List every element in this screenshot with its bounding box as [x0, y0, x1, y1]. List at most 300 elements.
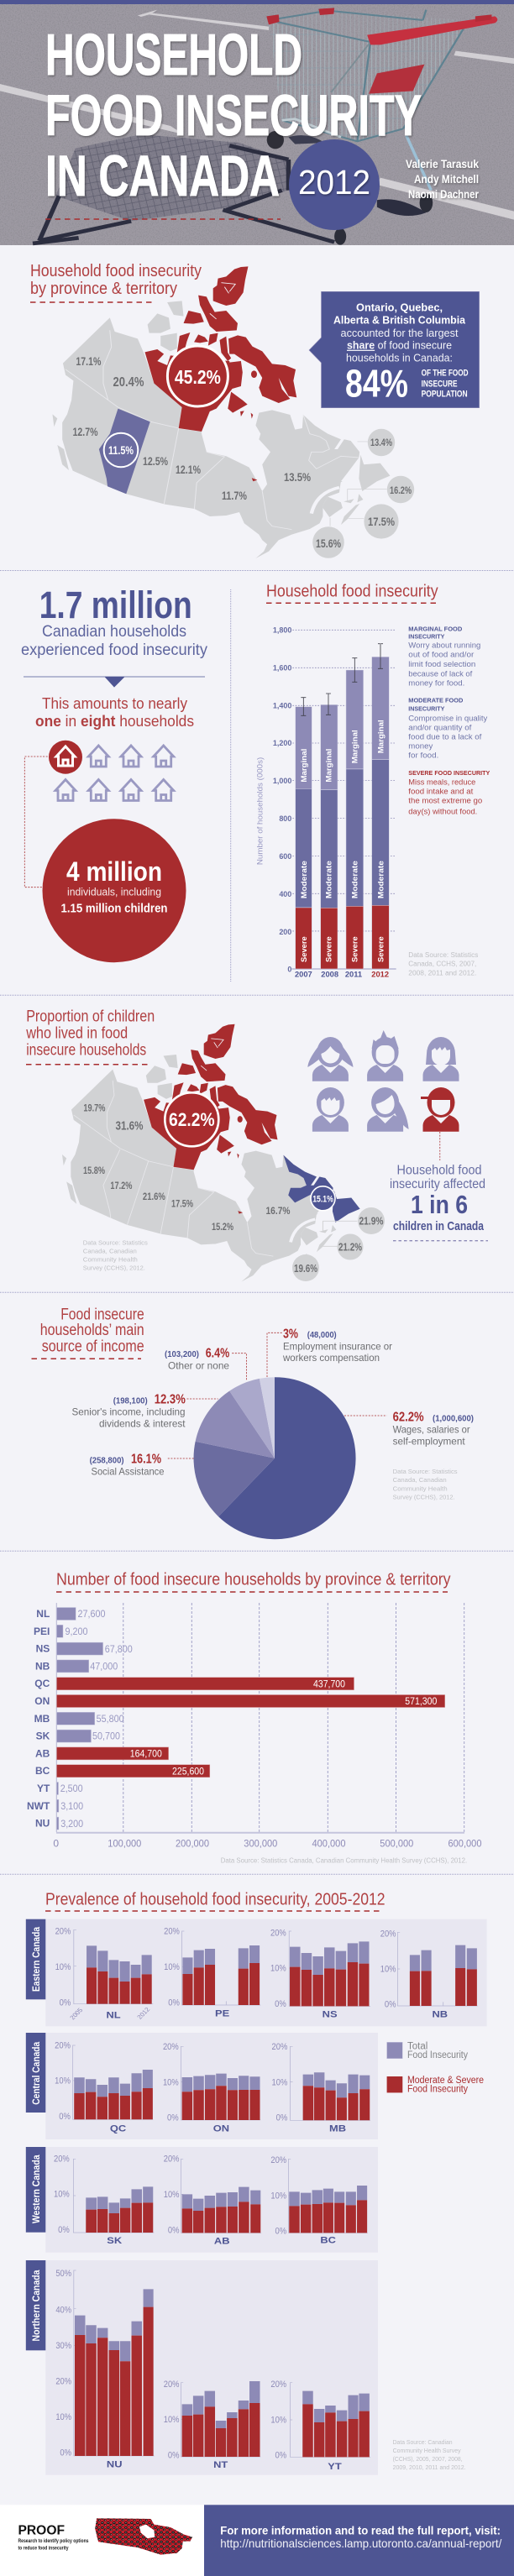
label: 12.3% senior's income: (198,100) — [113, 1395, 148, 1406]
highlight: Newfoundland 15.1% — [311, 1186, 335, 1211]
data source note — [408, 951, 478, 977]
legend: Food Insecurity — [407, 2085, 468, 2095]
chart: NT: 0% — [168, 2449, 180, 2460]
label: 6.4% other or none: 6.4% — [206, 1347, 229, 1361]
authors: Valerie Tarasuk — [406, 157, 479, 170]
red circle: 4 million: 1.15 million children — [60, 902, 168, 916]
label: 3% employment insurance: 3% — [283, 1327, 298, 1341]
chart: BC: 0% — [275, 2226, 286, 2236]
heading: Proportion of children — [26, 1008, 155, 1026]
chart: MB: 10% — [272, 2076, 288, 2087]
horizontal bar chart: NU — [35, 1818, 50, 1830]
horizontal bar chart: 437,700 — [313, 1678, 345, 1689]
footer left: PROOF branding — [0, 2505, 204, 2576]
callout: 84% share: POPULATION — [422, 390, 468, 400]
horizontal bar chart: 9,200 — [66, 1626, 88, 1637]
chart: NB: 10% — [380, 1964, 396, 1974]
label: 3% employment insurance — [282, 1327, 392, 1364]
legend definitions: Compromise in quality — [408, 714, 488, 722]
legend definitions: money for food. — [408, 679, 464, 688]
stacked bar chart: Marginal — [376, 720, 385, 753]
chart: NL: NL — [106, 2009, 121, 2020]
label: 16.1% social assistance: Social Assistance — [91, 1466, 165, 1478]
chart: NL: 2005 — [68, 2007, 84, 2021]
chart: YT: 0% — [275, 2450, 286, 2460]
province labels: 11.7% — [222, 490, 247, 502]
chart: PE: 10% — [164, 1961, 180, 1972]
chart: NB: 20% — [380, 1928, 396, 1939]
leader lines — [168, 1333, 387, 1458]
stacked bar chart — [255, 626, 396, 978]
horizontal bar chart: 225,600 — [172, 1765, 204, 1777]
stacked bar chart: Severe — [300, 936, 308, 962]
data source note: Canada, CCHS, 2007, — [408, 961, 476, 968]
horizontal bar chart: YT — [37, 1783, 50, 1794]
province labels: 17.1% — [76, 355, 101, 368]
connectors — [307, 1221, 357, 1262]
province labels: 13.5% — [284, 471, 311, 484]
stacked bar chart: 1,400 — [273, 701, 291, 709]
chart: BC: BC — [320, 2235, 336, 2245]
label: 6.4% other or none: (103,200) — [165, 1349, 199, 1359]
footer left: PROOF branding: Research to identify policy options — [18, 2539, 89, 2544]
horizontal bar chart: NB — [35, 1660, 50, 1672]
callout: 1 in 6 children — [390, 1163, 488, 1241]
province labels: 12.1% — [176, 463, 201, 476]
stacked bar chart: Moderate — [376, 861, 385, 898]
stacked bar chart: Marginal — [300, 749, 308, 783]
horizontal bar chart: QC — [34, 1678, 50, 1689]
label: 62.2% wages: Wages, salaries or — [393, 1424, 470, 1436]
legend definitions: food due to a lack of — [408, 732, 482, 741]
label: 3% employment insurance: workers compensation — [282, 1352, 380, 1364]
callout: 1 in 6 children: children in Canada — [393, 1219, 485, 1233]
chart: QC — [55, 2040, 153, 2134]
highlight: Nunavut 45.2% — [167, 346, 228, 406]
tab: Northern Canada: Northern Canada — [32, 2270, 42, 2341]
horizontal bar chart: SK — [36, 1730, 50, 1742]
subheading — [21, 623, 207, 659]
callout: 84% share: Ontario, Quebec, — [356, 302, 443, 314]
heading: Household food insecurity — [266, 583, 438, 601]
label: 12.3% senior's income: Senior's income, including — [72, 1406, 185, 1418]
legend definitions: out of food and/or — [408, 651, 474, 659]
stacked bar chart: 800 — [279, 814, 291, 823]
label: 6.4% other or none: Other or none — [168, 1360, 229, 1372]
authors: Naomi Dachner — [408, 187, 479, 201]
chart: MB: 20% — [272, 2041, 288, 2052]
chart: YT — [270, 2379, 370, 2472]
callout: 84% share: INSECURE — [422, 379, 458, 389]
province labels: 31.6% — [116, 1120, 144, 1134]
horizontal bar chart: 400,000 — [312, 1837, 346, 1849]
panel: prevalence 2005-2012 — [26, 1890, 487, 2475]
panel: household food insecurity stacked bar chart — [255, 583, 490, 978]
chart: YT: 20% — [270, 2379, 286, 2390]
Atlantic callout bubbles: 21.2% — [338, 1240, 362, 1253]
red circle: 4 million: 4 million — [66, 856, 162, 887]
dashed connector — [24, 757, 48, 887]
stacked bar chart: 400 — [279, 890, 291, 898]
highlight: Nunavut 62.2%: 62.2% — [169, 1109, 215, 1130]
chart: NS — [270, 1927, 370, 2019]
label: 3% employment insurance: (48,000) — [307, 1330, 337, 1340]
tab: Northern Canada — [26, 2260, 45, 2350]
data source note: 2008, 2011 and 2012. — [408, 970, 476, 977]
label: 62.2% wages — [393, 1410, 474, 1448]
legend definitions: MODERATE FOOD — [408, 697, 464, 704]
horizontal bar chart: 2,500 — [60, 1783, 83, 1794]
chart: NS: 20% — [270, 1927, 286, 1938]
stacked bar chart: Severe — [376, 936, 385, 962]
chart: NL — [55, 1926, 153, 2021]
highlight: Alberta 11.5%: 11.5% — [108, 444, 134, 457]
stacked bar chart: Severe — [325, 936, 333, 962]
legend definitions: MARGINAL FOOD — [408, 626, 463, 633]
data source note: Data Source: Statistics Canada, Canadian Community Health Survey (CCHS), 2012. — [221, 1856, 467, 1864]
legend definitions: SEVERE FOOD INSECURITY — [408, 769, 490, 777]
chart: PE: 20% — [164, 1926, 180, 1936]
chart: NT: NT — [213, 2459, 228, 2470]
chart: NU: 10% — [55, 2411, 71, 2422]
stacked bar chart: Moderate — [350, 861, 359, 898]
data source note: 2009, 2010, 2011 and 2012. — [393, 2463, 466, 2471]
stacked bar chart: 0 — [287, 966, 291, 974]
heading: Number of food insecure households by province & territory — [56, 1570, 451, 1589]
horizontal bar chart: 300,000 — [244, 1837, 278, 1849]
legend: Total — [407, 2042, 427, 2052]
horizontal bar chart: 600,000 — [448, 1837, 482, 1849]
province labels — [83, 1102, 291, 1233]
legend definitions: limit food selection — [408, 660, 475, 668]
chart: QC: 0% — [59, 2111, 71, 2122]
data source note: Community Health — [83, 1255, 138, 1263]
horizontal bar chart: 3,100 — [60, 1800, 83, 1812]
horizontal bar chart: BC — [35, 1765, 50, 1777]
panel: main source of income — [32, 1306, 474, 1539]
subheading: experienced food insecurity — [21, 641, 207, 659]
data source note — [393, 1468, 458, 1500]
horizontal bar chart: AB — [35, 1747, 50, 1759]
red circle: 4 million — [42, 819, 186, 962]
data source note: Canada, Canadian — [83, 1247, 137, 1254]
stacked bar chart: 1,000 — [273, 777, 291, 785]
legend definitions: food intake and at — [408, 787, 474, 795]
chart: ON — [163, 2041, 260, 2134]
heading: insecure households — [26, 1042, 146, 1060]
province labels: 21.6% — [143, 1191, 165, 1202]
horizontal bar chart: NWT — [27, 1800, 50, 1812]
chart: NU: 30% — [55, 2340, 71, 2351]
horizontal bar chart: 571,300 — [405, 1695, 438, 1707]
horizontal bar chart: 500,000 — [380, 1837, 414, 1849]
chart: NT — [164, 2379, 260, 2470]
data source note: Canada, Canadian — [393, 1476, 447, 1484]
callout: 84% share: 84% — [345, 362, 408, 406]
tab: Western Canada: Western Canada — [32, 2155, 42, 2223]
chart: NU: 40% — [55, 2305, 71, 2315]
chart: QC: 10% — [55, 2076, 71, 2086]
chart: AB: 10% — [164, 2189, 180, 2200]
Atlantic callout bubbles — [312, 429, 414, 558]
chart: AB — [164, 2154, 261, 2246]
legend definitions — [408, 626, 490, 815]
big number: 1.7 million — [39, 584, 192, 626]
chart: QC: 20% — [55, 2040, 71, 2050]
red circle: 4 million: individuals, including — [67, 887, 161, 898]
callout: 1 in 6 children: 1 in 6 — [411, 1190, 468, 1219]
horizontal bar chart: MB — [34, 1713, 50, 1725]
data source note: Community Health — [393, 1484, 448, 1492]
chart: NT: 20% — [164, 2379, 180, 2390]
stacked bar chart: 1,200 — [273, 739, 291, 747]
Atlantic callout bubbles: 13.4% — [370, 437, 392, 448]
title underline — [45, 218, 281, 220]
stacked bar chart: Moderate — [325, 861, 333, 898]
label: 12.3% senior's income: 12.3% — [155, 1392, 186, 1406]
heading: Household food insecurity — [30, 262, 202, 280]
Atlantic callout bubbles: 19.6% — [294, 1262, 317, 1275]
panel: 1.7 million households — [21, 584, 207, 962]
tab: Western Canada — [26, 2147, 45, 2233]
callout: 84% share: Alberta & British Columbia — [333, 315, 466, 327]
year badge: 2012 — [298, 163, 370, 202]
title: IN CANADA — [45, 144, 280, 208]
callout: 84% share — [309, 291, 480, 408]
legend definitions: money — [408, 742, 433, 751]
data source note: Data Source: Statistics — [408, 951, 478, 959]
icon group: six children, one highlighted — [307, 1030, 459, 1132]
stacked bar chart: 200 — [279, 928, 291, 936]
subheading: Canadian households — [42, 623, 186, 641]
chart: NL: 2012 — [135, 2006, 151, 2020]
chart: SK: 0% — [58, 2224, 70, 2235]
chart: SK: 20% — [54, 2153, 70, 2164]
horizontal bar chart: 100,000 — [108, 1837, 142, 1849]
chart: QC: QC — [110, 2123, 127, 2134]
stacked bar chart: 600 — [279, 852, 291, 861]
highlight: Nunavut 62.2% — [165, 1092, 218, 1146]
pie chart — [194, 1377, 356, 1539]
legend definitions: and/or quantity of — [408, 723, 472, 731]
Atlantic callout bubbles — [292, 1207, 385, 1281]
heading: households’ main — [40, 1322, 144, 1339]
arrow divider — [24, 677, 205, 687]
chart: NS: 0% — [275, 1998, 286, 2009]
chart: AB: 20% — [164, 2154, 180, 2164]
horizontal bar chart: 50,700 — [92, 1730, 120, 1742]
chart: SK: SK — [107, 2235, 123, 2246]
label: 16.1% social assistance — [90, 1453, 165, 1478]
label: 62.2% wages: (1,000,600) — [433, 1413, 474, 1423]
legend definitions: day(s) without food. — [408, 807, 477, 815]
chart: ON: 20% — [163, 2041, 179, 2052]
tab: Eastern Canada: Eastern Canada — [32, 1926, 42, 1992]
legend definitions: Miss meals, reduce — [408, 778, 475, 786]
icon: PROOF map logo — [95, 2518, 192, 2555]
heading — [30, 262, 202, 302]
heading: source of income — [42, 1338, 144, 1355]
province labels: 17.2% — [110, 1180, 133, 1191]
province labels: 12.7% — [72, 426, 97, 438]
chart: AB: AB — [214, 2236, 230, 2246]
province labels: 12.5% — [143, 455, 168, 468]
legend: Food Insecurity — [407, 2050, 468, 2060]
horizontal bar chart: 3,200 — [60, 1818, 83, 1830]
title — [45, 22, 422, 208]
Atlantic callout bubbles: 21.9% — [359, 1214, 384, 1227]
chart: PE: PE — [215, 2008, 229, 2018]
charts: Western Canada — [54, 2153, 368, 2246]
region backgrounds — [45, 1919, 487, 2475]
province labels: 15.8% — [83, 1165, 105, 1176]
horizontal bar chart — [27, 1603, 482, 1849]
legend definitions: for food. — [408, 751, 438, 760]
Atlantic callout bubbles: 16.2% — [390, 484, 412, 496]
chart: NB — [380, 1928, 478, 2019]
chart: MB: MB — [329, 2123, 346, 2134]
data source note: Survey (CCHS), 2012. — [83, 1264, 145, 1271]
highlight: Newfoundland 15.1%: 15.1% — [312, 1194, 333, 1204]
data source note: (CCHS), 2005, 2007, 2008, — [393, 2455, 463, 2463]
data source note — [83, 1238, 148, 1271]
legend definitions: the most extreme go — [408, 797, 482, 805]
horizontal bar chart: PEI — [34, 1626, 50, 1637]
footer left: PROOF branding: PROOF — [18, 2523, 65, 2537]
chart: MB — [272, 2041, 370, 2134]
data source note — [393, 2438, 466, 2471]
chart: SK — [54, 2153, 154, 2246]
heading — [32, 1306, 144, 1359]
photo: shopping cart in parking lot — [0, 4, 514, 245]
legend definitions: Worry about running — [408, 641, 480, 650]
charts: Central Canada — [55, 2040, 370, 2134]
panel: food insecurity by province — [30, 262, 480, 558]
chart: ON: 10% — [163, 2076, 179, 2087]
chart: NU: 50% — [55, 2268, 71, 2279]
tab: Central Canada — [26, 2033, 45, 2113]
panel: number of households by province — [27, 1570, 482, 1864]
legend definitions: INSECURITY — [408, 705, 444, 713]
chart: BC: 10% — [270, 2191, 286, 2201]
authors: Andy Mitchell — [414, 172, 479, 186]
stacked bar chart: 1,600 — [273, 663, 291, 672]
highlight: Nunavut 45.2%: 45.2% — [175, 366, 221, 388]
panel: proportion of children — [25, 1008, 488, 1281]
horizontal bar chart: 47,000 — [90, 1661, 118, 1673]
province labels: 19.7% — [83, 1102, 106, 1113]
callout: 84% share: OF THE FOOD — [422, 369, 469, 379]
chart: NS: 10% — [270, 1963, 286, 1973]
chart: YT: 10% — [270, 2415, 286, 2425]
tab: Eastern Canada — [26, 1919, 45, 1999]
authors — [406, 157, 479, 201]
data source note: Data Source: Statistics — [393, 1468, 458, 1475]
horizontal bar chart: 0 — [53, 1837, 59, 1849]
label: 16.1% social assistance: (258,800) — [90, 1456, 124, 1466]
chart: NS: NS — [323, 2009, 338, 2019]
tab: Central Canada: Central Canada — [32, 2041, 42, 2105]
legend definitions: because of lack of — [408, 669, 473, 678]
horizontal bar chart: ON — [34, 1695, 50, 1707]
chart: PE: 0% — [168, 1997, 180, 2008]
stacked bar chart: 2012 — [371, 970, 389, 978]
chart: MB: 0% — [276, 2113, 288, 2123]
header panel — [0, 0, 514, 245]
label: 6.4% other or none — [165, 1347, 229, 1372]
stacked bar chart: 2007 — [295, 970, 312, 978]
province labels: 20.4% — [113, 375, 144, 390]
chart: ON: 0% — [167, 2113, 179, 2123]
chart: SK: 10% — [54, 2188, 70, 2199]
icon row: eight houses, one highlighted — [49, 741, 174, 801]
map of Canada: highlighted Nunavut and Alberta — [52, 266, 390, 558]
heading: Food insecure — [60, 1306, 144, 1324]
legend definitions: INSECURITY — [408, 632, 444, 640]
chart: NU: NU — [107, 2458, 123, 2469]
data source note: Community Health Survey — [393, 2447, 461, 2454]
chart: AB: 0% — [168, 2225, 180, 2235]
heading — [25, 1008, 155, 1065]
data source note: Data Source: Statistics — [83, 1238, 148, 1246]
charts: Eastern Canada — [55, 1926, 478, 2021]
heading: Prevalence of household food insecurity, 2005-2012 — [45, 1890, 386, 1908]
footer right: more information: For more information and to read the full report, visit: — [220, 2523, 501, 2537]
label: 16.1% social assistance: 16.1% — [131, 1453, 161, 1467]
one in eight text — [35, 695, 194, 730]
callout: 84% share: share of food insecure — [347, 340, 452, 352]
footer left: PROOF branding: to reduce food insecurity — [18, 2547, 69, 2552]
top colour bar — [0, 0, 514, 4]
horizontal bar chart: 164,700 — [130, 1748, 162, 1760]
callout: 84% share: accounted for the largest — [341, 327, 459, 339]
chart: NB: NB — [432, 2009, 448, 2019]
chart: NT: 10% — [164, 2414, 180, 2425]
dashed connector — [439, 1132, 441, 1160]
legend: Moderate & Severe — [407, 2076, 484, 2086]
chart: NL: 10% — [55, 1961, 71, 1972]
horizontal bar chart: 55,800 — [97, 1713, 124, 1725]
label: 12.3% senior's income — [72, 1392, 186, 1429]
stacked bar chart: 1,800 — [273, 626, 291, 634]
chart: NU: 20% — [55, 2376, 71, 2386]
callout: 1 in 6 children: insecurity affected — [390, 1177, 485, 1191]
heading: who lived in food — [25, 1025, 128, 1043]
map of Canada: highlighted Nunavut and Newfoundland and Labrador — [62, 1024, 360, 1281]
heading: by province & territory — [30, 280, 177, 298]
chart: YT: YT — [328, 2461, 342, 2472]
horizontal bar chart: NS — [36, 1643, 50, 1655]
chart: BC: 20% — [270, 2155, 286, 2165]
label: 62.2% wages: 62.2% — [393, 1410, 424, 1424]
province labels — [72, 355, 311, 502]
footer right: more information — [204, 2505, 514, 2576]
chart: BC — [270, 2155, 368, 2245]
one in eight text: This amounts to nearly — [42, 695, 187, 712]
charts: Northern Canada — [55, 2268, 370, 2472]
label: 62.2% wages: self-employment — [393, 1436, 465, 1448]
horizontal bar chart: NL — [36, 1608, 50, 1620]
stacked bar chart: Number of households (000s) — [255, 757, 264, 865]
chart: ON: ON — [213, 2123, 229, 2134]
stacked bar chart: 2011 — [345, 970, 362, 978]
data source note: Data Source: Canadian — [393, 2438, 453, 2446]
chart: NU: 0% — [60, 2447, 71, 2458]
callout: 1 in 6 children: Household food — [396, 1163, 482, 1177]
title: HOUSEHOLD — [45, 22, 302, 87]
highlight: Alberta 11.5% — [104, 433, 138, 467]
province labels: 16.7% — [265, 1205, 291, 1217]
